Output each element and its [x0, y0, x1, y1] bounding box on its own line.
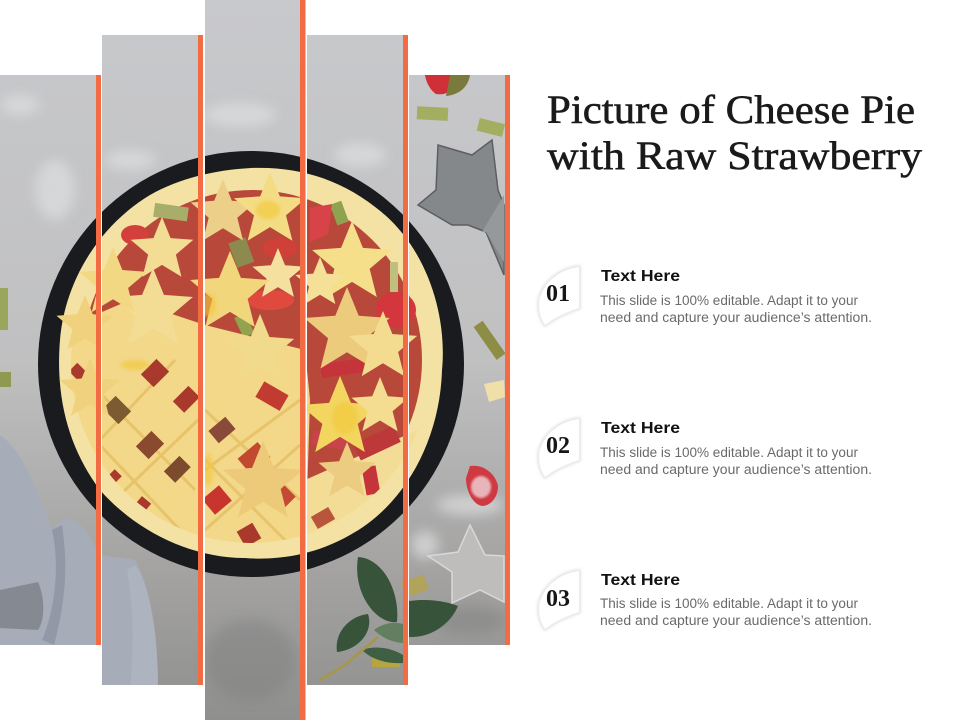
filling details — [121, 201, 416, 338]
filling — [90, 190, 422, 479]
body 01 — [600, 293, 872, 325]
table surface — [0, 0, 520, 720]
badge 02 — [539, 419, 579, 477]
item 01 — [539, 267, 872, 325]
lattice openings — [69, 358, 401, 547]
body 01: need and capture your audience’s attention. — [600, 310, 872, 325]
orange strip bars — [96, 0, 510, 720]
photo: cheese pie cut into five vertical strips — [0, 0, 520, 720]
title: Picture of Cheese Pie — [547, 87, 915, 132]
body 02 — [600, 445, 872, 477]
crust rim — [59, 168, 443, 559]
lattice crust — [71, 304, 418, 543]
raw strawberries — [425, 75, 498, 506]
title: with Raw Strawberry — [547, 133, 922, 178]
flour dusting — [0, 95, 504, 559]
star cookie cutters — [418, 140, 504, 603]
body 02: need and capture your audience’s attention. — [600, 462, 872, 477]
title — [547, 87, 922, 178]
body 03: need and capture your audience’s attention. — [600, 613, 872, 628]
badge 01 — [539, 267, 579, 325]
body 01: This slide is 100% editable. Adapt it to your — [600, 293, 858, 308]
dark stone patches — [205, 606, 506, 700]
heading 03: Text Here — [601, 572, 680, 589]
leaves — [320, 557, 458, 680]
pastry crumb — [484, 380, 505, 402]
badge 01: 01 — [546, 281, 570, 307]
badge 03: 03 — [546, 586, 570, 612]
pan — [38, 151, 464, 577]
body 03 — [600, 596, 872, 628]
rhubarb pieces — [0, 106, 506, 667]
heading 01: Text Here — [601, 268, 680, 285]
badge 03 — [539, 571, 579, 629]
item 03 — [539, 571, 872, 629]
pastry stars — [56, 172, 417, 517]
heading 02: Text Here — [601, 420, 680, 437]
towel — [0, 435, 158, 690]
egg glaze highlights — [121, 201, 358, 486]
badge 02: 02 — [546, 433, 570, 459]
item 02 — [539, 419, 872, 477]
body 03: This slide is 100% editable. Adapt it to your — [600, 596, 858, 611]
body 02: This slide is 100% editable. Adapt it to your — [600, 445, 858, 460]
